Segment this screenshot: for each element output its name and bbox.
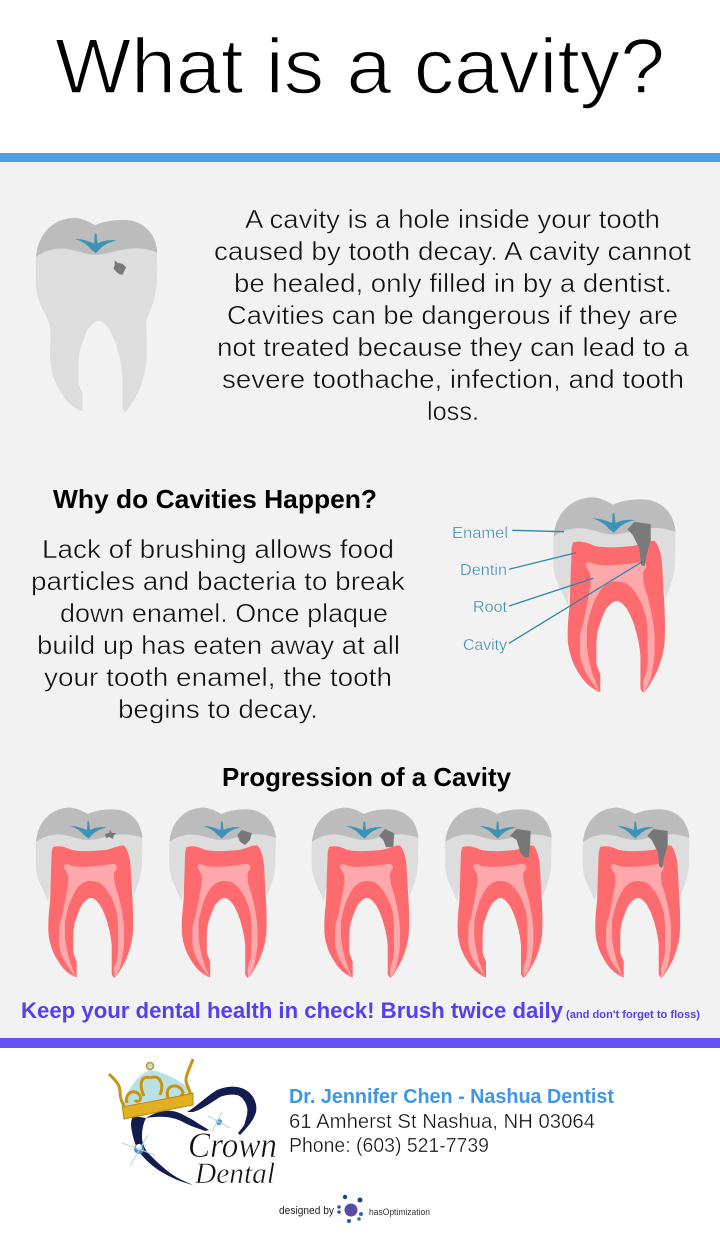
callout: brush twice daily: Keep your dental health in check! Brush twice daily (21, 998, 564, 1023)
logo wordmark: Crown (188, 1125, 277, 1165)
contact details: Dr. Jennifer Chen - Nashua Dentist (289, 1086, 614, 1108)
tooth stage 1 (36, 808, 142, 978)
logo wordmark: Dental (194, 1157, 275, 1190)
crown (109, 1059, 193, 1119)
anatomy labels: Root (473, 599, 508, 616)
panel: main background (0, 162, 720, 1038)
logo wordmark (188, 1125, 277, 1190)
credit: designed by hasOptimization: designed by (279, 1205, 334, 1217)
chart: cavity progression teeth (36, 808, 689, 978)
diagram: labelled tooth anatomy (452, 497, 676, 693)
heart outline (131, 1087, 256, 1185)
text block: why cavities happen: Lack of brushing allows food (42, 534, 394, 564)
anatomy labels: Cavity (463, 637, 507, 654)
text block: cavity definition: not treated because they can lead to a (217, 332, 690, 362)
leader lines (509, 530, 643, 643)
contact details: Phone: (603) 521-7739 (289, 1135, 489, 1157)
anatomy labels (452, 525, 508, 654)
text block: cavity definition: A cavity is a hole inside your tooth (245, 204, 660, 234)
text block: why cavities happen: down enamel. Once plaque (60, 598, 388, 628)
contact details: 61 Amherst St Nashua, NH 03064 (289, 1111, 595, 1133)
sparkle gems (122, 1112, 230, 1166)
top blue band (0, 153, 720, 162)
text block: cavity definition: caused by tooth decay. A cavity cannot (214, 236, 692, 266)
title: What is a cavity? (55, 22, 665, 110)
text block: why cavities happen: particles and bacteria to break (31, 566, 406, 596)
logo: Crown Dental (109, 1059, 277, 1190)
text block: cavity definition: Cavities can be dangerous if they are (227, 300, 678, 330)
anatomy labels: Enamel (452, 525, 508, 542)
icon: tooth with small cavity (36, 218, 157, 412)
tooth stage 4 (445, 808, 552, 978)
text block: why cavities happen: your tooth enamel, the tooth (44, 662, 392, 692)
callout: brush twice daily: (and don't forget to floss) (566, 1009, 700, 1021)
heading: progression of a cavity: Progression of a Cavity (222, 762, 512, 792)
text block: cavity definition: be healed, only filled in by a dentist. (234, 268, 672, 298)
text block: cavity definition: loss. (427, 396, 479, 426)
text block: cavity definition (214, 204, 692, 426)
heading: why do cavities happen: Why do Cavities Happen? (53, 484, 377, 514)
anatomy labels: Dentin (460, 562, 507, 579)
credit: designed by hasOptimization: hasOptimization (369, 1207, 430, 1218)
credit: designed by hasOptimization (279, 1195, 430, 1223)
text block: why cavities happen: begins to decay. (118, 694, 318, 724)
tooth cross-section (553, 497, 676, 693)
tooth stage 3 (312, 808, 418, 978)
text block: cavity definition: severe toothache, infection, and tooth (222, 364, 684, 394)
bottom purple band (0, 1038, 720, 1048)
text block: why cavities happen (31, 534, 406, 724)
contact details (289, 1086, 614, 1157)
text block: why cavities happen: build up has eaten away at all (37, 630, 400, 660)
tooth stage 2 (169, 808, 276, 978)
icon: hasOptimization dots (337, 1195, 363, 1223)
tooth stage 5 (583, 808, 689, 978)
